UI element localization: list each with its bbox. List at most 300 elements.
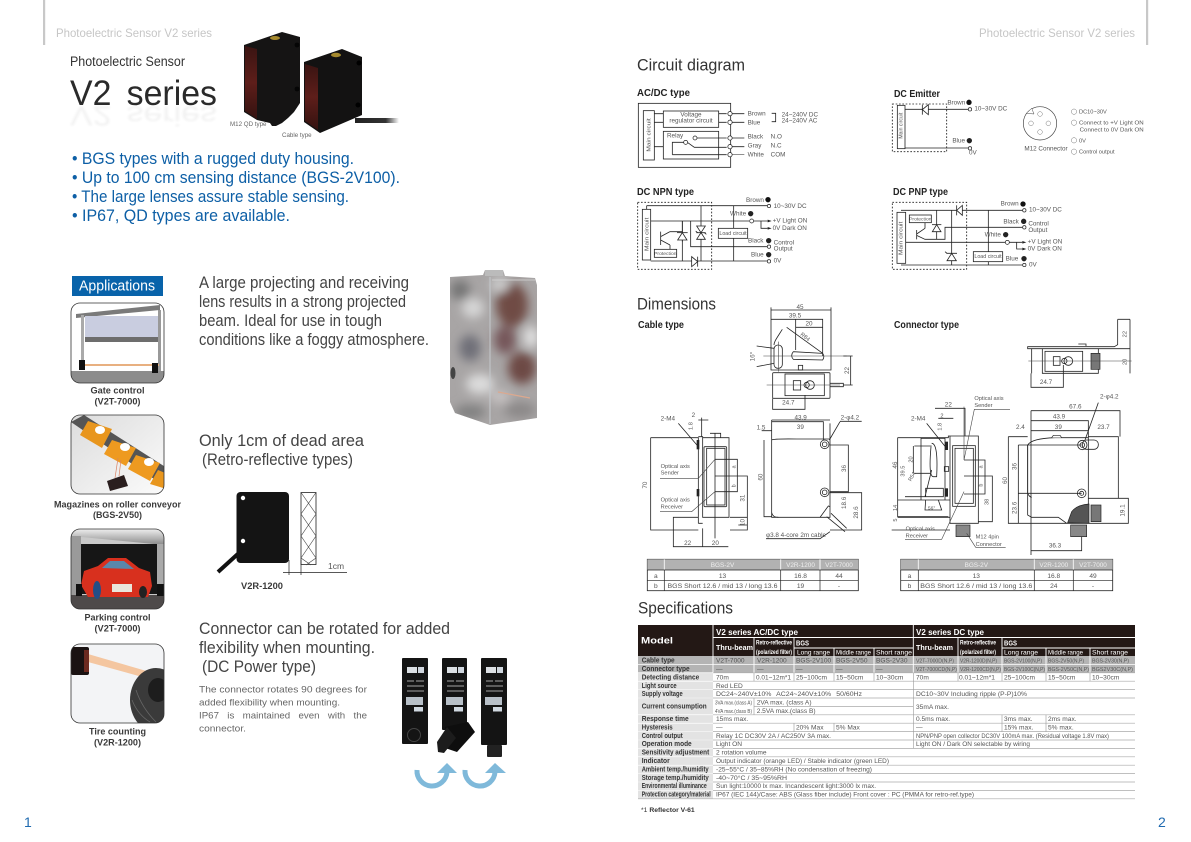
feature bullet list: • IP67, QD types are available. — [72, 207, 290, 225]
side view: Connector — [976, 542, 1002, 548]
AC/DC values: 25~100cm — [796, 674, 827, 681]
side view: 56° — [928, 505, 935, 511]
pin legend: Connect to 0V Dark ON — [1080, 128, 1144, 134]
table: cable type dimensions: BGS-2V — [711, 562, 735, 569]
table: connector type dimensions: a — [908, 573, 912, 580]
table: cable type dimensions: V2R-1200 — [786, 562, 815, 569]
application: tire counting — [70, 644, 164, 724]
pin legend: 0V — [1079, 138, 1086, 144]
AC/DC values: Red LED — [716, 683, 743, 690]
side view: 22 — [945, 401, 952, 408]
AC/DC values: BGS-2V50 — [836, 658, 868, 665]
top view: 20 — [1122, 359, 1128, 365]
side view: 20 — [908, 456, 914, 463]
diagram: 1cm dead area: 1cm — [328, 561, 344, 571]
AC/DC values: V2R-1200 — [757, 658, 787, 665]
AC/DC values: — — [876, 666, 883, 673]
caption: tire counting: Tire counting — [89, 726, 146, 738]
circuit: AC/DC type: Relay — [667, 132, 684, 139]
side view: Sender — [661, 470, 679, 476]
front view: 60 — [1002, 476, 1009, 484]
DC values: BGS-2V30(N,P) — [1092, 659, 1129, 665]
DC values: BGS-2V50(N,P) — [1048, 659, 1084, 665]
circuit: DC NPN type: Output — [774, 245, 793, 252]
feature text: dead area: (Retro-reflective types) — [202, 450, 353, 469]
side view — [642, 412, 747, 547]
AC/DC values: — — [757, 666, 764, 673]
description: connector rotation: added flexibility when mounting. — [199, 698, 340, 708]
title: V2 series — [70, 74, 217, 113]
circuit: AC/DC type — [638, 103, 819, 167]
DC values: 3ms max. — [1004, 716, 1033, 723]
table header: Long range — [797, 650, 830, 656]
circuit: DC Emitter: Blue — [952, 138, 965, 145]
table header: Thru-beam — [716, 645, 753, 652]
circuit: DC Emitter: Main circuit — [899, 112, 905, 139]
top view — [749, 304, 853, 409]
DC values: 0.01~12m*1 — [959, 674, 995, 681]
circuit: DC NPN type: Load circuit — [719, 231, 747, 237]
AC/DC values: Output indicator (orange LED) / Stable indicator (green LED) — [716, 758, 889, 765]
description: connector rotation — [199, 684, 367, 734]
circuit: DC PNP type: Main circuit — [899, 221, 905, 255]
feature text: rotating connector: Connector can be rotated for added — [199, 619, 450, 638]
side view: 1.8 — [689, 422, 695, 430]
page number 2: 2 — [1158, 814, 1166, 830]
heading: connector type: Connector type — [894, 320, 959, 331]
feature text: rotating connector — [199, 619, 450, 676]
row labels: Supply voltage — [642, 691, 683, 698]
circuit: DC NPN type: Brown — [746, 197, 764, 204]
circuit: AC/DC type: COM — [771, 152, 785, 159]
circuit: DC PNP type — [892, 201, 1063, 269]
pin legend — [1071, 109, 1144, 156]
application: parking control — [71, 529, 164, 609]
AC/DC values: 10~30cm — [876, 674, 904, 681]
circuit: DC Emitter: 10~30V DC — [974, 105, 1008, 112]
circuit: DC NPN type: Main circuit — [644, 217, 650, 251]
description: connector rotation: IP67 is maintained even with the — [199, 710, 367, 722]
table header: Long range — [1004, 650, 1038, 656]
feature text: strong projected beam: lens results in a strong projected — [199, 292, 406, 311]
photo: three connector positions — [402, 658, 507, 757]
row labels: Environmental illuminance — [642, 783, 707, 790]
side view: Receiver — [661, 504, 683, 510]
circuit: AC/DC type: Brown — [748, 111, 766, 118]
circuit: AC/DC type: N.O — [771, 134, 782, 141]
side view: Sender — [974, 403, 993, 409]
circuit: DC NPN type: 10~30V DC — [774, 203, 807, 210]
photo caption: cable type: Cable type — [282, 132, 312, 139]
circuit: AC/DC type: Voltage — [680, 111, 702, 118]
heading: cable type: Cable type — [638, 320, 684, 331]
AC/DC values: 15~50cm — [836, 674, 864, 681]
circuit: DC NPN type: White — [730, 211, 747, 218]
table: cable type dimensions: - — [838, 583, 840, 590]
front view: 23.7 — [1097, 424, 1110, 431]
feature bullet list: • Up to 100 cm sensing distance (BGS-2V100). — [72, 169, 400, 187]
AC/DC values: 2VA max. (class A) — [757, 700, 812, 707]
caption: parking control: (V2T-7000) — [94, 624, 140, 634]
table header — [638, 625, 1135, 656]
heading: DC PNP type: DC PNP type — [893, 187, 948, 198]
model label: V2R-1200 — [241, 581, 283, 592]
front view: φ3.8 4-core 2m cable — [766, 532, 827, 539]
DC values: Light ON / Dark ON selectable by wiring — [916, 741, 1030, 748]
DC values: — — [916, 724, 923, 731]
dimension drawing: cable type — [642, 304, 862, 547]
row labels: Control output — [642, 733, 683, 740]
feature text: strong projected beam: conditions like a foggy atmosphere. — [199, 330, 429, 349]
table: connector type dimensions: 13 — [973, 573, 980, 580]
diagram: 1cm dead area — [218, 492, 347, 592]
circuit: AC/DC type: Blue — [748, 120, 761, 127]
table grid — [638, 656, 1135, 799]
table: cable type dimensions: V2T-7000 — [825, 562, 853, 569]
title: V2 series — [70, 100, 217, 132]
side view: 38 — [985, 499, 991, 505]
DC values: BGS-2V50C(N,P) — [1048, 667, 1089, 673]
side view: 2 — [940, 413, 944, 419]
table: cable type dimensions — [647, 559, 858, 591]
arrow: rotation 2 — [465, 763, 506, 786]
table: cable type dimensions: b — [654, 583, 658, 590]
AC/DC values: 0.01~12m*1 — [756, 674, 791, 681]
DC values: V2T-7000D(N,P) — [916, 659, 954, 665]
circuit: DC PNP type: Control — [1028, 221, 1049, 228]
circuit: AC/DC type: 24~240V DC — [782, 112, 819, 119]
front view: 43.9 — [795, 414, 807, 421]
AC/DC values: 2.5VA max.(class B) — [757, 708, 816, 715]
table header: V2 series DC type — [916, 628, 985, 637]
table: connector type dimensions: BGS-2V — [965, 562, 989, 569]
top view: 22 — [1122, 331, 1128, 337]
row labels: Storage temp./humidity — [642, 775, 709, 782]
top view: 16° — [749, 351, 757, 361]
circuit: DC NPN type: Blue — [751, 252, 764, 259]
front view: 1.5 — [757, 424, 766, 431]
product photo: two sensors — [230, 32, 399, 139]
circuit: DC PNP type: Protection — [909, 216, 932, 222]
AC/DC values: — — [716, 666, 723, 673]
table: cable type dimensions: BGS Short 12.6 / mid 13 / long 13.6 — [668, 583, 778, 590]
AC/DC values: — — [796, 666, 803, 673]
side view: 10 — [740, 518, 747, 526]
side view: 5 — [893, 519, 899, 522]
AC/DC values: 15ms max. — [716, 716, 748, 723]
DC values: 15~50cm — [1048, 674, 1076, 681]
heading: AC/DC type: AC/DC type — [637, 88, 690, 99]
front view: 36 — [841, 464, 848, 472]
row labels: Sensitivity adjustment — [642, 750, 710, 757]
heading: circuit diagram: Circuit diagram — [637, 56, 745, 74]
title: Photoelectric Sensor — [70, 54, 185, 69]
feature text: strong projected beam — [199, 273, 429, 349]
DC values: BGS-2V100(N,P) — [1004, 659, 1042, 665]
arrow: rotation 1 — [417, 763, 457, 786]
circuit: DC Emitter: Brown — [947, 100, 966, 107]
DC values: 35mA max. — [916, 704, 949, 711]
front view: 39 — [797, 424, 804, 431]
top view: 24.7 — [1040, 379, 1053, 386]
DC values: BGS2V30C(N,P) — [1092, 667, 1133, 673]
M12 connector pinout — [1023, 107, 1068, 153]
caption: parking control — [84, 612, 150, 634]
feature text: rotating connector: (DC Power type) — [202, 657, 316, 676]
DC values: BGS-2V100C(N,P) — [1004, 667, 1045, 673]
front view — [1002, 394, 1128, 555]
dimension drawing: connector type — [892, 319, 1132, 555]
heading: dimensions: Dimensions — [637, 294, 716, 314]
description: connector rotation: The connector rotates 90 degrees for — [199, 684, 367, 696]
AC/DC values: 20% Max — [796, 724, 824, 731]
front view: 43.9 — [1053, 413, 1066, 420]
top view: 39.5 — [789, 312, 802, 319]
caption: gate control — [90, 386, 144, 408]
table: connector type dimensions: b — [908, 583, 912, 590]
side view: Optical axis — [661, 464, 690, 470]
table header: BGS — [1004, 638, 1017, 648]
table: connector type dimensions: - — [1092, 583, 1094, 590]
AC/DC values: Light ON — [716, 741, 742, 748]
row labels: Light source — [642, 683, 677, 690]
DC values: 10~30cm — [1092, 674, 1120, 681]
left page header: Photoelectric Sensor V2 series — [56, 26, 212, 40]
applications heading — [72, 276, 163, 296]
application: gate control — [71, 303, 164, 383]
pin legend: DC10~30V — [1079, 110, 1107, 116]
circuit: DC PNP type: 0V — [1029, 262, 1038, 269]
AC/DC values: 4VA max.(class B) — [715, 709, 752, 715]
circuit: DC NPN type: Black — [748, 238, 764, 245]
circuit: DC PNP type: 0V Dark ON — [1028, 246, 1062, 253]
feature text: strong projected beam: beam. Ideal for use in tough — [199, 311, 382, 330]
circuit: DC PNP type: Brown — [1001, 201, 1019, 208]
top view — [1028, 319, 1132, 387]
circuit: DC NPN type: Control — [774, 240, 794, 247]
top view: 24.7 — [782, 400, 795, 407]
DC values: 0.5ms max. — [916, 716, 950, 723]
front view: 60 — [758, 473, 765, 481]
side view: 70 — [642, 481, 649, 489]
feature bullet list: • The large lenses assure stable sensing. — [72, 188, 349, 206]
photo: sensor in fog — [450, 270, 537, 425]
page number 1: 1 — [24, 814, 32, 830]
table: connector type dimensions: 24 — [1050, 583, 1058, 590]
AC/DC values — [715, 658, 974, 799]
pin legend: Control output — [1079, 150, 1115, 156]
feature bullet list — [72, 150, 400, 225]
top view: 45 — [796, 304, 804, 311]
side view: 31 — [740, 494, 747, 502]
caption: parking control: Parking control — [84, 612, 150, 624]
DC values: DC10~30V Including ripple (P-P)10% — [916, 691, 1027, 698]
circuit: DC PNP type: +V Light ON — [1028, 238, 1063, 245]
specifications table — [638, 625, 1135, 799]
DC values: V2R-1200CD(N,P) — [960, 667, 1001, 673]
side view: 39.5 — [900, 466, 906, 477]
circuit: DC NPN type — [638, 197, 808, 269]
DC values: 15% max. — [1004, 724, 1033, 731]
row labels: Hysteresis — [642, 724, 673, 731]
table: cable type dimensions: 13 — [719, 573, 726, 580]
table: connector type dimensions: V2R-1200 — [1039, 562, 1069, 569]
side view: M12 4pin — [976, 535, 999, 541]
front view: 19.1 — [1120, 504, 1127, 517]
description: connector rotation: connector. — [199, 724, 246, 734]
side view: a — [731, 465, 737, 468]
table header: BGS — [796, 638, 809, 648]
table header: Model — [641, 636, 673, 646]
DC values: V2T-7000CD(N,P) — [916, 667, 957, 673]
side view: 2 — [692, 412, 696, 419]
side view: b — [731, 484, 737, 487]
row labels: Ambient temp./humidity — [642, 766, 709, 773]
AC/DC values: 5% Max — [836, 724, 861, 731]
AC/DC values: — — [716, 724, 723, 731]
heading: DC NPN type: DC NPN type — [637, 187, 694, 198]
photo caption: M12 QD type: M12 QD type — [230, 121, 267, 128]
row labels: Current consumption — [642, 704, 707, 711]
top view: 22 — [844, 366, 851, 374]
side view: 14 — [893, 505, 899, 511]
table header: Retro-reflective — [960, 640, 997, 646]
right page header: Photoelectric Sensor V2 series — [979, 26, 1135, 40]
circuit: DC PNP type: Load circuit — [974, 254, 1002, 260]
AC/DC values: 2 rotation volume — [716, 750, 767, 757]
DC values: NPN/PNP open collector DC30V 100mA max. (Residual voltage 1.8V max) — [916, 733, 1109, 740]
circuit: DC PNP type: White — [985, 232, 1001, 239]
row labels: Protection category/material — [642, 792, 711, 799]
side view: Optical axis — [661, 497, 690, 503]
feature text: rotating connector: flexibility when mounting. — [199, 638, 375, 657]
front view: 18.6 — [841, 496, 848, 509]
circuit: AC/DC type: White — [748, 152, 764, 159]
feature text: strong projected beam: A large projecting and receiving — [199, 273, 409, 292]
table header: Thru-beam — [916, 645, 953, 652]
side view: 2-M4 — [661, 416, 676, 423]
side view: R54 — [908, 471, 918, 483]
table header: Retro-reflective — [756, 640, 793, 646]
circuit: DC NPN type: 0V — [774, 258, 782, 265]
caption: tire counting — [89, 726, 146, 748]
AC/DC values: Sun light:10000 lx max. Incandescent light:3000 lx max. — [716, 783, 876, 790]
side view: Receiver — [906, 534, 928, 540]
circuit: AC/DC type: Gray — [748, 143, 762, 150]
row labels — [642, 658, 711, 799]
DC values: 2ms max. — [1048, 716, 1077, 723]
circuit: AC/DC type: N.C — [771, 143, 782, 150]
front view: 36 — [1012, 462, 1019, 470]
table header: Short range — [876, 650, 912, 656]
caption: magazines on roller conveyor: Magazines on roller conveyor — [54, 500, 181, 510]
circuit: DC PNP type: Output — [1028, 227, 1048, 234]
front view: 28.6 — [853, 506, 860, 519]
AC/DC values: — — [836, 666, 843, 673]
table: cable type dimensions: 16.8 — [794, 573, 807, 580]
heading: specifications: Specifications — [638, 598, 733, 618]
DC values: V2R-1200D(N,P) — [960, 659, 997, 665]
row labels: Indicator — [642, 758, 670, 765]
side view: a — [979, 465, 985, 468]
front view: 23.6 — [1012, 501, 1019, 514]
circuit: AC/DC type: 24~240V AC — [782, 118, 818, 125]
heading: DC Emitter: DC Emitter — [894, 89, 940, 100]
AC/DC values: V2T-7000 — [716, 658, 745, 665]
row labels: Detecting distance — [642, 674, 699, 681]
AC/DC values: IP67 (IEC 144)/Case: ABS (Glass fiber include) Front cover : PC (PMMA for retro-ref.type) — [716, 792, 974, 799]
table header: V2 series AC/DC type — [716, 628, 799, 637]
applications heading: Applications — [79, 278, 155, 294]
feature text: dead area: Only 1cm of dead area — [199, 431, 365, 450]
side view — [892, 396, 1010, 548]
front view: 67.6 — [1069, 404, 1082, 411]
top view: R84 — [799, 332, 811, 343]
caption: gate control: (V2T-7000) — [94, 396, 140, 408]
AC/DC values: DC24~240V±10% AC24~240V±10% 50/60Hz — [716, 691, 862, 698]
AC/DC values: 3VA max.(class A) — [715, 701, 752, 707]
circuit: AC/DC type: regulator circuit — [669, 118, 713, 125]
front view: 36.3 — [1049, 543, 1062, 550]
caption: tire counting: (V2R-1200) — [94, 738, 141, 748]
side view: 20 — [712, 540, 719, 547]
side view: 46 — [892, 461, 899, 469]
pin legend: Connect to +V Light ON — [1079, 121, 1144, 127]
DC values: 70m — [916, 674, 929, 681]
M12 connector pinout: M12 Connector — [1024, 146, 1068, 153]
DC values: 5% max. — [1048, 724, 1074, 731]
circuit: DC NPN type: 0V Dark ON — [773, 225, 807, 232]
table header: (polarized filter) — [960, 650, 996, 656]
side view: 1.8 — [938, 423, 944, 431]
DC values — [916, 659, 1133, 748]
circuit: AC/DC type: Black — [748, 134, 764, 141]
feature text: dead area — [199, 431, 365, 469]
application: magazines on roller conveyor — [71, 415, 170, 494]
circuit: DC Emitter — [892, 100, 1144, 156]
table: cable type dimensions: 44 — [835, 573, 843, 580]
AC/DC values: BGS-2V30 — [876, 658, 908, 665]
AC/DC values: -25~55°C / 35~85%RH (No condensation of freezing) — [716, 765, 872, 773]
circuit: DC NPN type: +V Light ON — [773, 218, 808, 225]
side view: b — [979, 484, 985, 487]
caption: magazines on roller conveyor — [54, 500, 181, 521]
row labels: Response time — [642, 716, 689, 723]
table: connector type dimensions: 49 — [1089, 573, 1097, 580]
table header: Middle range — [836, 650, 871, 656]
table: connector type dimensions: BGS Short 12.6 / mid 13 / long 13.6 — [920, 583, 1033, 590]
row labels: Connector type — [642, 666, 690, 673]
caption: magazines on roller conveyor: (BGS-2V50) — [93, 510, 142, 521]
table: cable type dimensions: a — [654, 573, 658, 580]
circuit: DC PNP type: Black — [1003, 219, 1020, 226]
row labels: Operation mode — [642, 741, 692, 748]
AC/DC values: 70m — [716, 674, 729, 681]
title — [70, 54, 217, 132]
front view: 2.4 — [1016, 424, 1025, 431]
front view: 2-φ4.2 — [1100, 394, 1119, 401]
circuit: AC/DC type: Main circuit — [647, 118, 653, 152]
table header: (polarized filter) — [756, 650, 792, 656]
side view: 22 — [684, 540, 692, 547]
table: connector type dimensions — [901, 559, 1113, 591]
table: connector type dimensions: 16.8 — [1047, 573, 1061, 580]
table header: Short range — [1092, 650, 1128, 656]
front view: 2-φ4.2 — [841, 414, 860, 421]
DC values: 25~100cm — [1004, 674, 1035, 681]
side view: Optical axis — [906, 527, 935, 533]
side view: 2-M4 — [911, 416, 926, 423]
